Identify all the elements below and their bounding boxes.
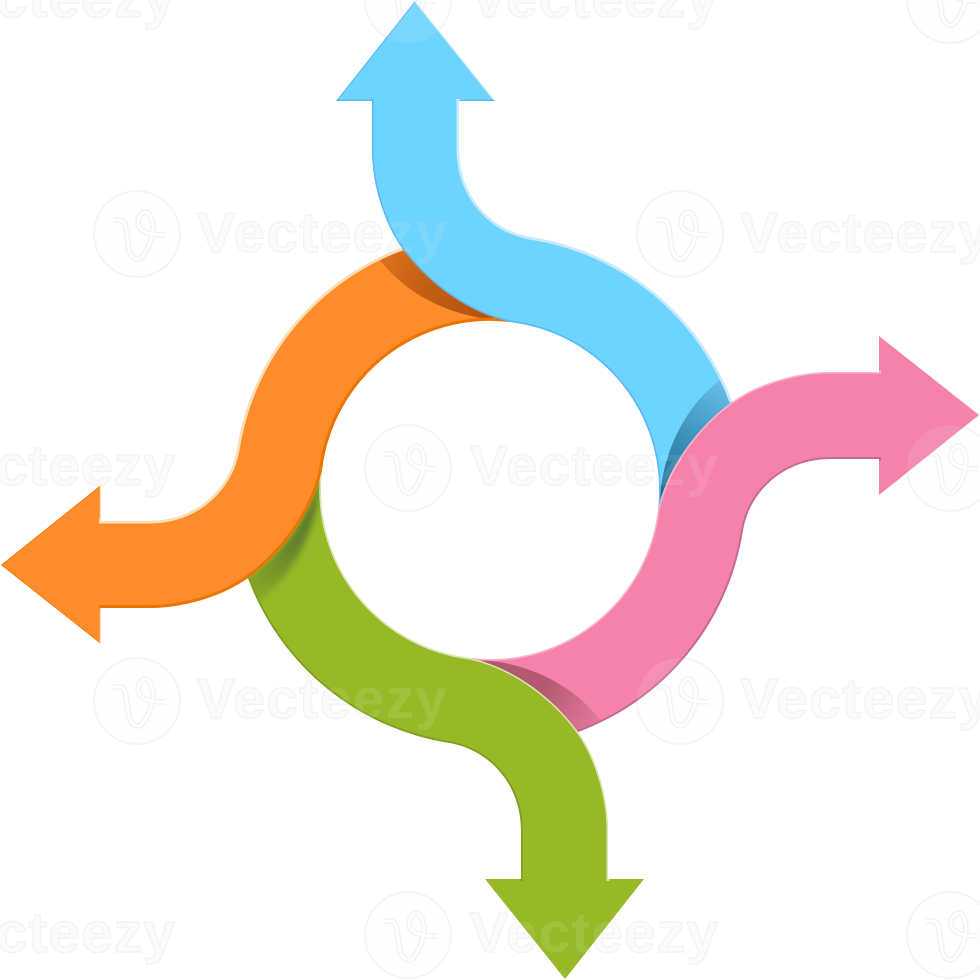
arrow: green pointing down bbox=[235, 470, 644, 979]
watermark layer behind arrows: Vecteezy bbox=[470, 901, 718, 965]
watermark layer over arrows: Vecteezy bbox=[197, 201, 447, 265]
watermark layer behind arrows: Vecteezy bbox=[197, 201, 447, 265]
arrow: orange pointing left bbox=[1, 235, 510, 644]
watermark layer behind arrows: Vecteezy bbox=[470, 434, 718, 498]
watermark layer over arrows: Vecteezy bbox=[470, 901, 718, 965]
watermark layer over arrows: Vecteezy bbox=[197, 667, 447, 731]
watermark layer over arrows: Vecteezy bbox=[470, 434, 718, 498]
watermark layer behind arrows: Vecteezy bbox=[197, 667, 447, 731]
arrow: blue pointing up bbox=[336, 1, 745, 510]
arrow: pink pointing right bbox=[470, 336, 979, 745]
